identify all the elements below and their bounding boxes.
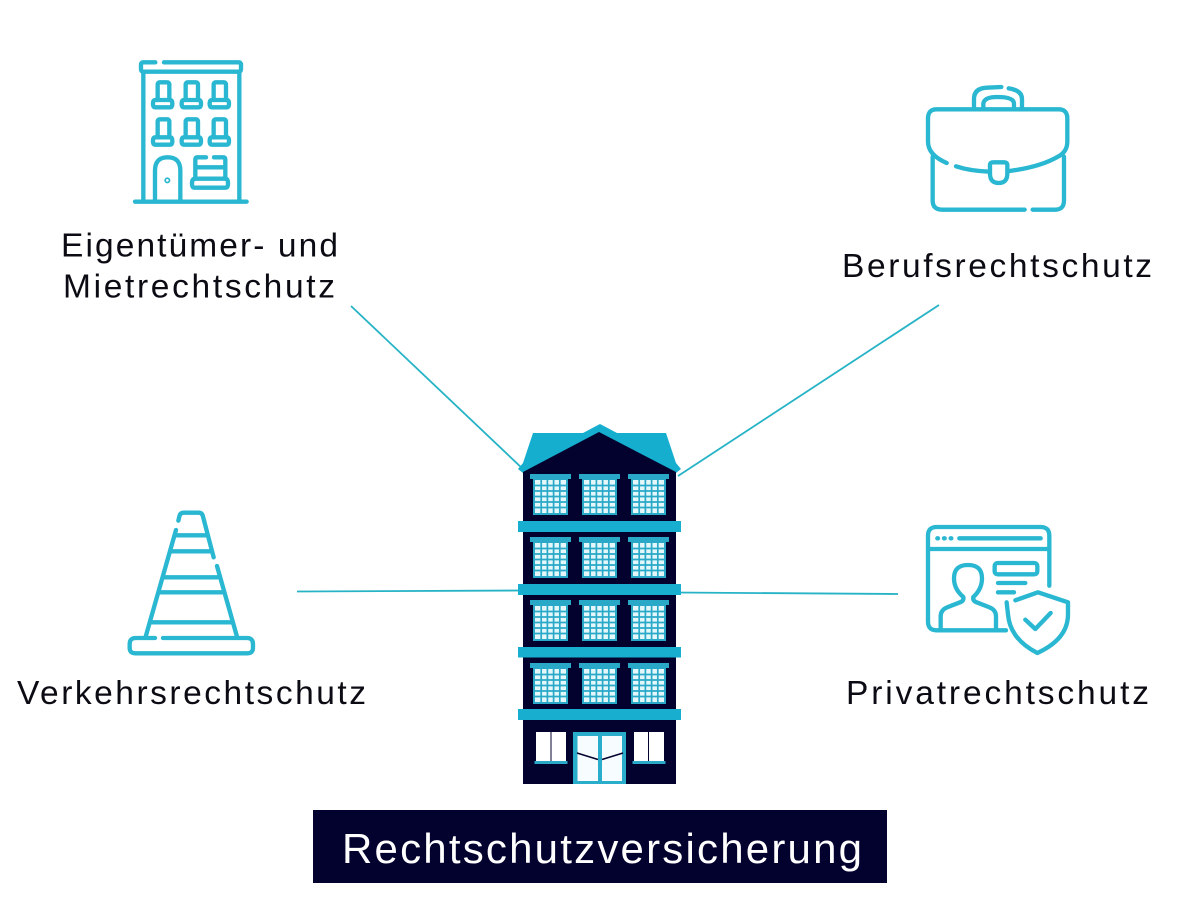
icon: briefcase — [928, 87, 1067, 210]
icon: traffic cone — [130, 513, 253, 653]
label: Verkehrsrechtschutz: Verkehrsrechtschutz — [17, 675, 366, 712]
connector: middle left — [297, 590, 523, 592]
building: floor bands — [518, 521, 681, 720]
building: door — [573, 732, 626, 784]
label: Berufsrechtschutz: Berufsrechtschutz — [842, 248, 1152, 285]
label: Eigentümer- und Mietrechtschutz: Mietrechtschutz — [63, 268, 335, 306]
label: Privatrechtschutz: Privatrechtschutz — [846, 675, 1149, 712]
connector: middle right — [676, 592, 898, 594]
central building illustration — [518, 424, 681, 784]
building: windows — [530, 474, 669, 704]
title banner: Rechtschutzversicherung — [342, 825, 862, 872]
title banner — [313, 810, 887, 883]
connector: top right — [678, 305, 939, 476]
icon: identity window with shield — [928, 527, 1068, 653]
building: ground floor windows — [534, 732, 666, 764]
icon: apartment building — [135, 62, 247, 202]
label: Eigentümer- und Mietrechtschutz — [61, 228, 338, 306]
connector: top left — [351, 306, 524, 470]
label: Eigentümer- und Mietrechtschutz: Eigentümer- und — [61, 228, 338, 264]
building: roof — [518, 433, 681, 473]
building: body — [523, 432, 676, 784]
